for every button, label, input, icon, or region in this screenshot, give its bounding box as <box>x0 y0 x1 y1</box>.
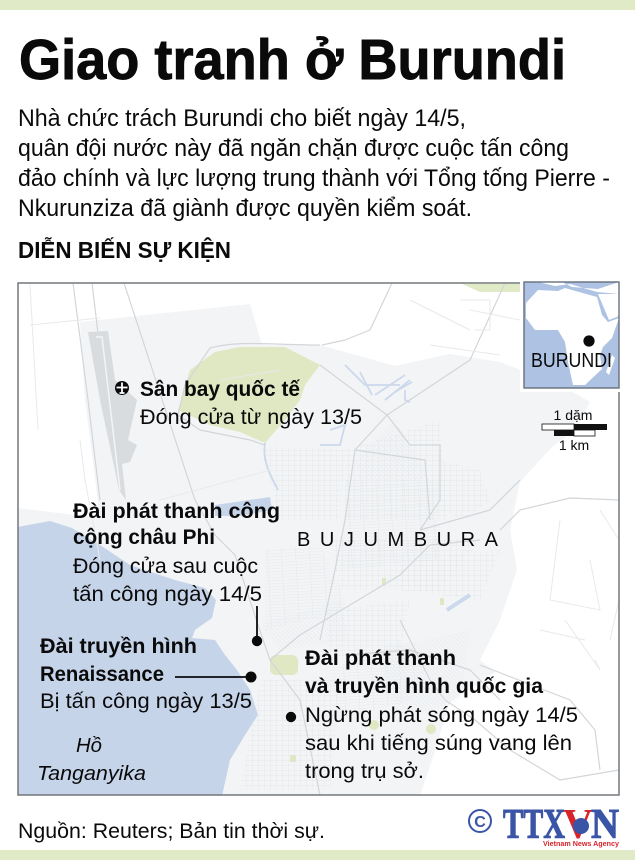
label: Renaissance TV: Bị tấn công ngày 13/5 <box>40 690 252 713</box>
intro text: quân đội nước này đã ngăn chặn được cuộc tấn công <box>18 135 569 162</box>
label: national radio and TV: và truyền hình quốc gia <box>305 675 543 698</box>
label: African public radio: Đài phát thanh công <box>73 500 280 523</box>
label: national radio and TV: trong trụ sở. <box>305 760 424 783</box>
scale bar: 1 dặm <box>554 407 592 423</box>
inset locator map <box>520 279 623 392</box>
intro text: Nkurunziza đã giành được quyền kiểm soát. <box>18 195 472 222</box>
label: airport <box>115 378 362 429</box>
label: lake <box>37 735 146 785</box>
logo: TTXVN: TTX <box>503 802 565 848</box>
intro text: đảo chính và lực lượng trung thành với Tổng tống Pierre - <box>18 165 610 192</box>
title: Giao tranh ở Burundi <box>19 28 566 92</box>
Madagascar <box>606 355 615 375</box>
thin outer roads <box>30 284 620 670</box>
scale bar: 1 km <box>559 437 589 453</box>
label: African public radio: cộng châu Phi <box>73 526 215 549</box>
source: Nguồn: Reuters; Bản tin thời sự. <box>18 820 325 843</box>
Africa <box>526 288 619 385</box>
logo: TTXVN: N <box>591 802 619 848</box>
map panel <box>17 279 623 796</box>
label: lake: Tanganyika <box>37 763 146 785</box>
intro text <box>18 105 610 222</box>
small parks <box>270 578 444 762</box>
map frame <box>18 283 619 795</box>
label: African public radio: tấn công ngày 14/5 <box>73 583 262 606</box>
park <box>178 347 320 443</box>
label: Renaissance TV: Đài truyền hình <box>40 635 197 658</box>
label: lake: Hồ <box>76 735 102 757</box>
label: national radio and TV: sau khi tiếng súng vang lên <box>305 732 572 755</box>
icon: airport <box>115 381 129 395</box>
top band <box>0 0 635 10</box>
city label: BUJUMBURA <box>297 529 499 551</box>
label: African public radio <box>73 500 280 646</box>
label: national radio and TV <box>286 647 578 783</box>
scale bar <box>542 407 607 453</box>
label: national radio and TV: Ngừng phát sóng ngày 14/5 <box>305 704 578 727</box>
logo: TTXVN: V <box>563 802 593 848</box>
label: African public radio: Đóng cửa sau cuộc <box>73 555 258 578</box>
rivers and ponds <box>264 365 470 610</box>
street grids <box>345 420 447 520</box>
inset locator map: BURUNDI <box>531 350 612 372</box>
roads <box>73 283 619 795</box>
label: airport: Sân bay quốc tế <box>140 378 300 401</box>
label: airport: Đóng cửa từ ngày 13/5 <box>140 406 362 429</box>
label: Renaissance TV <box>40 635 256 713</box>
bottom band <box>0 850 635 860</box>
top-right park strip <box>462 284 520 292</box>
lake Tanganyika <box>17 521 258 796</box>
intro text: Nhà chức trách Burundi cho biết ngày 14/5, <box>18 105 466 132</box>
logo: TTXVN: Vietnam News Agency <box>543 839 620 848</box>
label: national radio and TV: Đài phát thanh <box>305 647 456 670</box>
icon: copyright: C <box>474 814 486 831</box>
Arabia <box>598 294 619 320</box>
label: Renaissance TV: Renaissance <box>40 663 164 686</box>
section heading: DIỄN BIẾN SỰ KIỆN <box>18 235 231 263</box>
icon: copyright <box>469 810 491 832</box>
Europe <box>538 282 619 294</box>
urban area <box>17 304 590 795</box>
runway <box>88 331 137 500</box>
delta water <box>215 497 272 516</box>
